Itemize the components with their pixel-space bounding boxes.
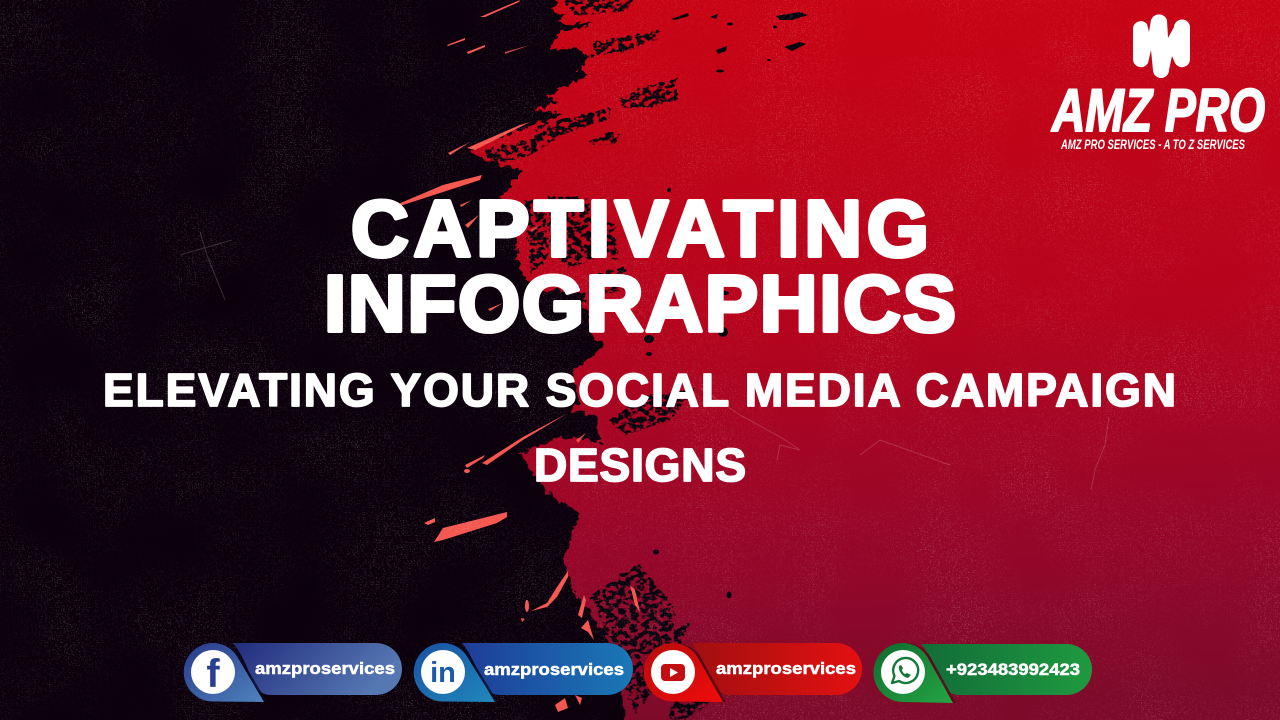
social badge: Facebook xyxy=(184,643,402,702)
social badge: Facebook: amzproservices xyxy=(255,659,395,678)
salmon paint streaks xyxy=(391,0,640,712)
subtitle: Elevating your social media campaign designs: DESIGNS xyxy=(534,439,746,491)
texture: faint cracks xyxy=(180,232,1109,490)
panel: black brush-stroke area xyxy=(0,0,630,720)
icon: AMZ Pro mark xyxy=(1133,14,1190,78)
title: Captivating Infographics xyxy=(324,184,956,348)
logo: AMZ Pro xyxy=(1050,14,1265,152)
dark ink flecks on the red area xyxy=(485,0,715,720)
social badge: LinkedIn: amzproservices xyxy=(484,660,624,679)
small dark ink spots xyxy=(644,12,808,598)
social badge: LinkedIn xyxy=(414,643,633,702)
subtitle: Elevating your social media campaign designs: ELEVATING YOUR SOCIAL MEDIA CAMPAIGN xyxy=(103,364,1176,416)
social badge: WhatsApp: +923483992423 xyxy=(946,660,1080,679)
title: Captivating Infographics: INFOGRAPHICS xyxy=(324,259,956,348)
social badge: YouTube xyxy=(644,643,862,702)
subtitle: Elevating your social media campaign designs xyxy=(103,364,1176,491)
social badge: LinkedIn: in xyxy=(430,657,456,689)
social badge: WhatsApp xyxy=(874,643,1092,703)
social badge: YouTube: amzproservices xyxy=(716,659,856,678)
title: Captivating Infographics: CAPTIVATING xyxy=(351,184,929,273)
social badge: Facebook: f xyxy=(206,652,220,696)
